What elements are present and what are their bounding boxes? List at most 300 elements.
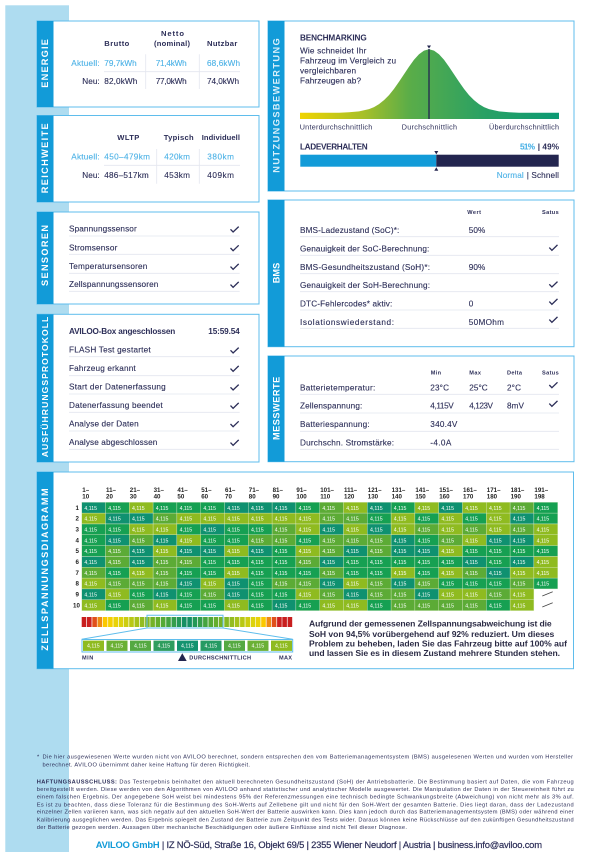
heatmap: cell voltages: 4,115	[132, 560, 145, 566]
heatmap: cell voltages: 4,115	[203, 538, 216, 544]
scale detail cells: 4,115	[252, 644, 264, 650]
heatmap: cell voltages: 4,115	[489, 582, 502, 588]
text: benchmarking question: Wie schneidet Ihr	[300, 46, 367, 55]
heatmap: cell voltages: 4,115	[322, 506, 335, 512]
column headers: 70	[225, 494, 232, 500]
chart: charging behaviour bar: | 49%	[538, 143, 560, 152]
table: Messwerte: 25°C	[469, 383, 488, 392]
heatmap: cell voltages: 4,115	[370, 571, 383, 577]
heatmap: cell voltages: 4,115	[180, 517, 192, 523]
heatmap: cell voltages: 4,115	[251, 538, 264, 544]
heatmap: cell voltages: 4,115	[275, 582, 288, 588]
heatmap: cell voltages: 4,115	[465, 592, 478, 598]
panel: BMS	[268, 200, 574, 347]
list: protocol steps	[69, 327, 240, 449]
column headers: 80	[249, 494, 256, 500]
heatmap: cell voltages: 4,115	[299, 560, 311, 566]
background strip	[5, 5, 69, 852]
heatmap: cell voltages: 4,115	[322, 592, 335, 598]
disclaimer: einzelner Zellen variieren kann, was sich negativ auf den aktuellen SoH-Wert der Batterie auswirken kann. Dies kann jedoch durch das Batteriemanagementsystem (BMS) oder während einer	[37, 810, 574, 816]
column headers: 110	[320, 494, 331, 500]
table: BMS: Wert	[467, 210, 481, 216]
table: Energie: Netto	[161, 29, 184, 38]
heatmap: cell voltages: 4,115	[322, 603, 335, 609]
row numbers: 10	[73, 602, 80, 609]
table: BMS: Genauigkeit der SoC-Berechnung:	[300, 245, 429, 254]
heatmap: cell voltages: 4,115	[84, 560, 97, 566]
heatmap: cell voltages: 4,115	[227, 603, 240, 609]
heatmap: cell voltages: 4,115	[180, 528, 192, 534]
list: protocol steps: FLASH Test gestartet	[69, 346, 151, 355]
heatmap: cell voltages: 4,115	[180, 538, 192, 544]
column headers: 61–	[225, 487, 236, 494]
heatmap: cell voltages: 4,115	[513, 506, 526, 512]
heatmap: cell voltages: 4,115	[370, 549, 383, 555]
table: BMS: 90%	[469, 263, 485, 272]
disclaimer	[37, 780, 574, 831]
heatmap: cell voltages: 4,115	[346, 538, 359, 544]
heatmap: cell voltages: 4,115	[108, 506, 121, 512]
heatmap: cell voltages: 4,115	[346, 592, 359, 598]
table: Reichweite: Individuell	[202, 133, 240, 142]
table: Energie: (nominal)	[154, 39, 190, 48]
heatmap: cell voltages: 4,115	[132, 506, 145, 512]
heatmap: cell voltages: 4,115	[203, 506, 216, 512]
heatmap: cell voltages: 4,115	[322, 560, 335, 566]
heatmap: cell voltages: 4,115	[394, 517, 407, 523]
table: BMS: BMS-Gesundheitszustand (SoH)*:	[300, 263, 430, 272]
heatmap: cell voltages: 4,115	[299, 549, 311, 555]
column headers: 21–	[130, 487, 141, 494]
heatmap: cell voltages: 4,115	[156, 560, 169, 566]
text: benchmarking question: vergleichbaren	[300, 67, 356, 76]
heatmap: cell voltages: 4,115	[418, 603, 430, 609]
heatmap: cell voltages: 4,115	[394, 560, 407, 566]
text: benchmarking question	[300, 34, 396, 85]
table: BMS: DTC-Fehlercodes* aktiv:	[300, 300, 392, 309]
table: Energie: Brutto	[104, 39, 130, 48]
heatmap: cell voltages: 4,115	[465, 560, 478, 566]
heatmap: cell voltages: 4,115	[370, 506, 383, 512]
disclaimer: HAFTUNGSAUSSCHLUSS: Das Testergebnis beinhaltet den aktuell berechneten Gesundheitszustand (SoH) der Antriebsbatterie. Die Bestimmung basiert auf Daten, die vom Fahrzeug	[37, 780, 574, 786]
heatmap: cell voltages: 4,115	[275, 592, 288, 598]
table: Messwerte: 340.4V	[430, 420, 458, 429]
heatmap: cell voltages: 4,115	[299, 582, 311, 588]
table: Energie: Aktuell:	[71, 59, 100, 68]
heatmap: cell voltages: 4,115	[203, 582, 216, 588]
row numbers: 9	[76, 592, 80, 598]
heatmap: cell voltages: 4,115	[227, 582, 240, 588]
column headers: 161–	[463, 487, 477, 494]
table: Reichweite: 420km	[164, 152, 190, 161]
chart: bell curve	[300, 46, 559, 131]
heatmap: cell voltages: 4,115	[251, 560, 264, 566]
heatmap: cell voltages: 4,115	[465, 517, 478, 523]
panel: Reichweite	[37, 116, 259, 202]
heatmap: cell voltages: 4,115	[251, 528, 264, 534]
list: protocol steps: Start der Datenerfassung	[69, 383, 166, 392]
heatmap: cell voltages: 4,115	[227, 506, 240, 512]
heatmap: cell voltages: 4,115	[84, 582, 97, 588]
table: Energie	[71, 29, 240, 89]
heatmap: cell voltages: 4,115	[441, 582, 454, 588]
column headers: 130	[368, 494, 379, 500]
heatmap: cell voltages: 4,115	[346, 506, 359, 512]
heatmap: cell voltages: 4,115	[299, 528, 311, 534]
heatmap: cell voltages: 4,115	[227, 592, 240, 598]
chart: bell curve: Durchschnittlich	[402, 122, 457, 131]
heatmap: cell voltages: 4,115	[418, 506, 430, 512]
row numbers: 8	[76, 581, 80, 588]
heatmap: cell voltages: 4,115	[346, 517, 359, 523]
heatmap: cell voltages: 4,115	[322, 538, 335, 544]
list: protocol steps: Analyse der Daten	[69, 419, 139, 428]
list: protocol steps: Analyse abgeschlossen	[69, 438, 158, 447]
heatmap: cell voltages: 4,115	[370, 538, 383, 544]
column headers: 20	[106, 494, 113, 500]
heatmap: cell voltages: 4,115	[299, 506, 311, 512]
table: Messwerte: Batteriespannung:	[300, 420, 370, 429]
row numbers: 1	[76, 505, 80, 512]
heatmap: cell voltages: 4,115	[275, 528, 288, 534]
heatmap: cell voltages: 4,115	[441, 528, 454, 534]
heatmap: cell voltages: 4,115	[227, 538, 240, 544]
table: Messwerte: 2°C	[507, 383, 521, 392]
heatmap: cell voltages: 4,115	[156, 538, 169, 544]
heatmap: cell voltages: 4,115	[180, 592, 192, 598]
heatmap: cell voltages: 4,115	[251, 571, 264, 577]
heatmap: cell voltages: 4,115	[346, 603, 359, 609]
table: Energie: 74,0kWh	[207, 77, 239, 86]
heatmap: cell voltages: 4,115	[537, 549, 549, 555]
heading: Ausführungsprotokoll: AUSFÜHRUNGSPROTOKOLL	[40, 317, 50, 457]
table: Energie: 68,6kWh	[207, 59, 240, 68]
heatmap: cell voltages: 4,115	[513, 517, 526, 523]
heatmap: cell voltages: 4,115	[322, 582, 335, 588]
heatmap: cell voltages: 4,115	[132, 603, 145, 609]
heading: Messwerte: MESSWERTE	[271, 377, 281, 440]
table: Reichweite: Aktuell:	[71, 152, 100, 161]
table: Energie: 79,7kWh	[104, 59, 137, 68]
list: Sensoren: Zellspannungssensoren	[69, 280, 159, 289]
heatmap: cell voltages: 4,115	[108, 592, 121, 598]
column headers: 191–	[534, 487, 549, 494]
column headers: 181–	[511, 487, 525, 494]
heatmap: cell voltages	[82, 502, 558, 611]
scale legend: MAX	[279, 656, 292, 662]
column headers: 71–	[249, 487, 260, 494]
heatmap: cell voltages: 4,115	[156, 571, 169, 577]
footnote: Die hier ausgewiesenen Werte wurden nicht von AVILOO berechnet, sondern entsprechen den vom Batteriemanagementsystem (BMS) ausgelesenen Werten und wurden vom Hersteller	[42, 755, 573, 761]
footnote	[37, 755, 573, 768]
heatmap: cell voltages: 4,115	[394, 603, 407, 609]
column headers: 100	[296, 494, 307, 500]
table: Reichweite: 486–517km	[104, 171, 149, 180]
heatmap: cell voltages: 4,115	[132, 517, 145, 523]
heatmap: cell voltages: 4,115	[299, 571, 311, 577]
heatmap: cell voltages: 4,115	[156, 603, 169, 609]
table: Messwerte: Delta	[507, 371, 523, 377]
heatmap: cell voltages: 4,115	[180, 560, 192, 566]
heatmap: cell voltages: 4,115	[108, 517, 121, 523]
table: Energie: 71,4kWh	[156, 59, 187, 68]
row numbers: 6	[76, 559, 80, 566]
heatmap: cell voltages: 4,115	[370, 528, 383, 534]
heatmap: cell voltages: 4,115	[489, 549, 502, 555]
column headers: 51–	[201, 487, 212, 494]
chart: bell curve: Überdurchschnittlich	[489, 122, 559, 131]
column headers: 60	[201, 494, 209, 500]
column headers: 10	[82, 494, 90, 500]
table: BMS	[300, 210, 559, 328]
heatmap: cell voltages: 4,115	[275, 506, 288, 512]
heatmap: cell voltages: 4,115	[180, 603, 192, 609]
heatmap: cell voltages: 4,115	[251, 517, 264, 523]
text: benchmarking question: Fahrzeugen ab?	[300, 76, 361, 85]
text: explanation: Problem zu beheben, laden Sie das Fahrzeug bitte auf 100% auf	[309, 639, 567, 649]
scale detail cells: 4,115	[204, 644, 217, 650]
column headers: 41–	[177, 487, 188, 494]
heatmap: cell voltages: 4,115	[441, 549, 454, 555]
panel: Zellspannungsdiagramm	[37, 472, 574, 669]
heatmap: cell voltages: 4,115	[441, 517, 454, 523]
heatmap: cell voltages: 4,115	[251, 506, 264, 512]
heatmap: cell voltages: 4,115	[227, 549, 240, 555]
panel: Sensoren	[37, 212, 259, 304]
disclaimer: einem falschen Ergebnis. Der angegebene SoH weist bei mindestens 95% der Referenzmessungen eine technisch bedingte Schwankungsbreite (Abweichung) von nicht mehr als 3% auf.	[37, 795, 574, 801]
scale legend	[82, 653, 292, 662]
heatmap: cell voltages: 4,115	[275, 571, 288, 577]
panel: Energie	[37, 21, 259, 107]
heatmap: cell voltages: 4,115	[370, 603, 383, 609]
table: Reichweite: 450–479km	[104, 152, 150, 161]
heatmap: cell voltages: 4,115	[513, 592, 526, 598]
heatmap: cell voltages: 4,115	[489, 528, 502, 534]
heatmap: cell voltages: 4,115	[418, 538, 430, 544]
column headers: 121–	[368, 487, 382, 494]
disclaimer: Es ist zu beachten, dass diese Toleranz für die Bestimmung des SoH-Werts auf Zellebene gilt und nicht für den SoH-Wert der gesamten Batterie. Dies liegt daran, dass der Ladezustand	[37, 802, 574, 808]
heatmap: cell voltages: 4,115	[132, 571, 145, 577]
heatmap: cell voltages: 4,115	[227, 560, 240, 566]
heatmap: cell voltages: 4,115	[251, 582, 264, 588]
heatmap: cell voltages: 4,115	[132, 528, 145, 534]
heatmap: cell voltages: 4,115	[275, 517, 288, 523]
heatmap: cell voltages: 4,115	[513, 560, 526, 566]
heatmap: cell voltages: 4,115	[132, 538, 145, 544]
scale detail cells: 4,115	[87, 644, 100, 650]
heatmap: cell voltages: 4,115	[322, 528, 335, 534]
row numbers: 4	[76, 537, 80, 544]
heatmap: cell voltages: 4,115	[441, 592, 454, 598]
heatmap: cell voltages: 4,115	[203, 517, 216, 523]
heatmap: cell voltages: 4,115	[227, 571, 240, 577]
heatmap: cell voltages: 4,115	[465, 582, 478, 588]
heatmap: cell voltages: 4,115	[275, 560, 288, 566]
column headers: 31–	[154, 487, 164, 494]
heatmap: cell voltages: 4,115	[299, 538, 311, 544]
list: Sensoren	[69, 225, 240, 291]
table: Reichweite: WLTP	[117, 133, 139, 142]
heatmap: cell voltages: 4,115	[441, 603, 454, 609]
table: Energie: Nutzbar	[207, 39, 237, 48]
table: Messwerte: Batterietemperatur:	[300, 383, 375, 392]
text: explanation: und lassen Sie es in diesem Zustand mehrere Stunden stehen.	[309, 648, 560, 658]
heatmap: cell voltages: 4,115	[441, 538, 454, 544]
table: Messwerte: Min	[431, 371, 442, 377]
heatmap: cell voltages: 4,115	[132, 549, 145, 555]
heatmap: cell voltages: 4,115	[322, 571, 335, 577]
scale detail cells	[82, 640, 293, 652]
text: explanation	[309, 619, 567, 658]
heatmap: cell voltages: 4,115	[537, 571, 549, 577]
scale detail cells: 4,115	[158, 644, 170, 650]
column headers: 141–	[415, 487, 430, 494]
table: BMS: Isolationswiederstand:	[300, 318, 394, 327]
heatmap: cell voltages: 4,115	[418, 517, 430, 523]
column headers: 40	[154, 494, 161, 500]
heatmap: cell voltages: 4,115	[346, 528, 359, 534]
column headers: 91–	[296, 487, 307, 494]
row numbers: 7	[76, 570, 80, 577]
heatmap: cell voltages: 4,115	[418, 528, 430, 534]
heatmap: cell voltages: 4,115	[84, 592, 97, 598]
heatmap: cell voltages: 4,115	[537, 506, 549, 512]
heatmap: cell voltages: 4,115	[322, 549, 335, 555]
heatmap: cell voltages: 4,115	[513, 528, 526, 534]
heatmap: cell voltages: 4,115	[513, 603, 526, 609]
heatmap: cell voltages: 4,115	[84, 506, 97, 512]
table: BMS: 50MOhm	[469, 318, 504, 327]
heatmap: cell voltages: 4,115	[537, 517, 549, 523]
heatmap: cell voltages: 4,115	[84, 603, 97, 609]
heatmap: cell voltages: 4,115	[346, 560, 359, 566]
heatmap: cell voltages: 4,115	[108, 538, 121, 544]
heatmap: cell voltages: 4,115	[299, 517, 311, 523]
list: protocol steps: Datenerfassung beendet	[69, 401, 163, 410]
heatmap: cell voltages: 4,115	[489, 560, 502, 566]
table: BMS: 0	[469, 300, 474, 309]
footer: AVILOO GmbH | IZ NÖ-Süd, Straße 16, Objekt 69/5 | 2355 Wiener Neudorf | Austria | business.info@aviloo.com	[96, 839, 542, 850]
heatmap: cell voltages: 4,115	[180, 506, 192, 512]
heatmap: cell voltages: 4,115	[394, 592, 407, 598]
empty cell marks	[542, 592, 553, 607]
heatmap: cell voltages: 4,115	[299, 603, 311, 609]
table: Messwerte: Zellenspannung:	[300, 401, 362, 410]
list: protocol steps: Fahrzeug erkannt	[69, 364, 136, 373]
table: BMS: BMS-Ladezustand (SoC)*:	[300, 226, 399, 235]
heatmap: cell voltages: 4,115	[132, 592, 145, 598]
table: Messwerte: Max	[469, 371, 482, 377]
scale detail cells: 4,115	[275, 644, 288, 650]
list: Sensoren: Spannungssensor	[69, 225, 137, 234]
scale detail cells: 4,115	[181, 644, 194, 650]
footnote: berechnet. AVILOO übernimmt daher keine Haftung für deren Richtigkeit.	[42, 762, 250, 768]
heatmap: cell voltages: 4,115	[537, 582, 549, 588]
heatmap: cell voltages: 4,115	[465, 528, 478, 534]
heatmap: cell voltages: 4,115	[537, 560, 549, 566]
list: protocol steps: AVILOO-Box angeschlossen	[69, 327, 175, 336]
column headers: 150	[415, 494, 426, 500]
panel: Messwerte	[268, 356, 574, 462]
chart: charging behaviour bar: 51%	[520, 143, 536, 152]
heatmap: cell voltages: 4,115	[108, 582, 121, 588]
disclaimer: Kalibrierung ausgeglichen werden. Das Ergebnis spiegelt den Zustand der Batterie zum Zeitpunkt des Tests wider. Daraus können keine Rückschlüsse auf den zukünftigen Gesundheitszustand	[37, 817, 574, 823]
heatmap: cell voltages: 4,115	[489, 506, 502, 512]
table: BMS: 50%	[469, 226, 485, 235]
text: explanation: Aufgrund der gemessenen Zellspannungsabweichung ist die	[309, 619, 552, 629]
table: BMS: Genauigkeit der SoH-Berechnung:	[300, 281, 430, 290]
colour scale bar	[82, 615, 293, 639]
column headers: 111–	[344, 487, 358, 494]
column headers: 190	[511, 494, 521, 500]
heatmap: cell voltages: 4,115	[513, 549, 526, 555]
heatmap: cell voltages: 4,115	[227, 517, 240, 523]
heatmap: cell voltages: 4,115	[370, 517, 383, 523]
chart: charging behaviour bar: Normal	[497, 171, 524, 180]
scale legend: DURCHSCHNITTLICH	[189, 656, 251, 662]
row numbers: 5	[76, 548, 80, 555]
heatmap: cell voltages: 4,115	[537, 528, 549, 534]
heatmap: cell voltages: 4,115	[84, 538, 97, 544]
column headers: 120	[344, 494, 355, 500]
panel: Ausführungsprotokoll	[37, 314, 259, 462]
heatmap: cell voltages: 4,115	[418, 592, 430, 598]
table: Messwerte	[300, 371, 559, 449]
table: Energie: 82,0kWh	[104, 77, 138, 86]
table: Messwerte: 4,115V	[430, 401, 454, 410]
heatmap: cell voltages: 4,115	[84, 549, 97, 555]
heatmap: cell voltages: 4,115	[465, 571, 478, 577]
heatmap: cell voltages: 4,115	[203, 528, 216, 534]
heatmap: cell voltages: 4,115	[370, 560, 383, 566]
table: Energie: 77,0kWh	[156, 77, 187, 86]
heatmap: cell voltages: 4,115	[370, 582, 383, 588]
table: BMS: Satus	[542, 210, 559, 216]
column headers: 151–	[439, 487, 454, 494]
row numbers: 3	[76, 527, 80, 534]
disclaimer: bereitgestellt werden. Diese werden von den Algorithmen von AVILOO anhand statistischer und analytischer Modelle ausgewertet. Die Manipulation der Daten in der Steuereinheit führt zu	[37, 787, 574, 793]
column headers: 198	[534, 494, 545, 500]
heatmap: cell voltages: 4,115	[394, 528, 407, 534]
table: Reichweite: 380km	[207, 152, 234, 161]
column headers: 171–	[487, 487, 501, 494]
heatmap: cell voltages: 4,115	[513, 538, 526, 544]
heatmap: cell voltages: 4,115	[513, 571, 526, 577]
scale detail cells: 4,115	[228, 644, 241, 650]
heatmap: cell voltages: 4,115	[489, 571, 502, 577]
heatmap: cell voltages: 4,115	[394, 549, 407, 555]
column headers: 140	[392, 494, 402, 500]
heatmap: cell voltages: 4,115	[156, 549, 169, 555]
heatmap: cell voltages: 4,115	[108, 571, 121, 577]
heading: Reichweite: REICHWEITE	[40, 123, 50, 193]
heatmap: cell voltages: 4,115	[275, 538, 288, 544]
heading: Energie: ENERGIE	[40, 39, 50, 88]
footnote: *	[37, 755, 40, 761]
scale detail cells: 4,115	[134, 644, 147, 650]
heatmap: cell voltages: 4,115	[156, 506, 169, 512]
heatmap: cell voltages: 4,115	[203, 560, 216, 566]
heatmap: cell voltages: 4,115	[180, 582, 192, 588]
heatmap: cell voltages: 4,115	[322, 517, 335, 523]
heatmap: cell voltages: 4,115	[465, 506, 478, 512]
heatmap: cell voltages: 4,115	[537, 538, 549, 544]
heading: Nutzungsbewertung: NUTZUNGSBEWERTUNG	[271, 38, 281, 173]
heatmap: cell voltages: 4,115	[394, 538, 407, 544]
chart: charging behaviour bar	[300, 143, 560, 180]
table: Reichweite: 409km	[207, 171, 234, 180]
heatmap: cell voltages: 4,115	[489, 517, 502, 523]
